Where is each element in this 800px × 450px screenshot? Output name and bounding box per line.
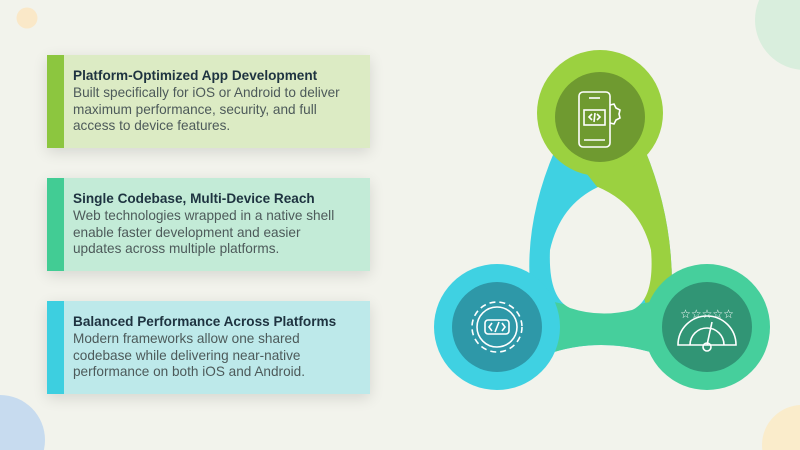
text block 3: Balanced Performance Across Platforms <box>73 314 336 329</box>
text block 3: Modern frameworks allow one shared <box>73 331 300 346</box>
node: top <box>537 50 663 176</box>
icon: phone code <box>579 92 620 147</box>
icon: gear code <box>472 302 522 352</box>
text block 1 <box>73 68 340 133</box>
panel: platform-optimized <box>47 55 370 148</box>
text block 2: Web technologies wrapped in a native shell <box>73 208 334 223</box>
text block 2: Single Codebase, Multi-Device Reach <box>73 191 315 206</box>
text block 2: updates across multiple platforms. <box>73 241 279 256</box>
arm: teal <box>545 300 700 355</box>
text block 1: access to device features. <box>73 118 230 133</box>
text block 2 <box>73 191 334 256</box>
text block 1: maximum performance, security, and full <box>73 102 317 117</box>
node: bottom-left <box>434 264 560 390</box>
text block 1: Built specifically for iOS or Android to deliver <box>73 85 340 100</box>
arms: base shape cyan <box>529 150 672 355</box>
text block 3 <box>73 314 336 379</box>
text block 3: codebase while delivering near-native <box>73 348 300 363</box>
panel: single codebase <box>47 178 370 271</box>
arm: green <box>560 140 690 320</box>
panel: balanced performance <box>47 301 370 394</box>
inner hole <box>550 187 652 314</box>
node: bottom-right <box>644 264 770 390</box>
text block 1: Platform-Optimized App Development <box>73 68 317 83</box>
text block 3: performance on both iOS and Android. <box>73 364 305 379</box>
icon: gauge stars: ☆☆☆☆☆ <box>680 307 734 321</box>
text block 2: enable faster development and easier <box>73 225 300 240</box>
